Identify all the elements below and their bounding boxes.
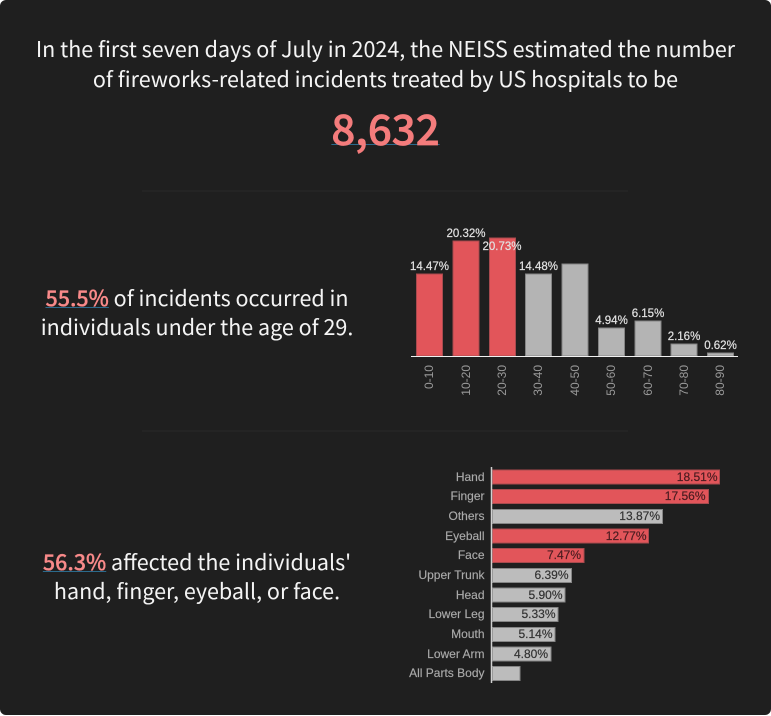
bar chart: incidents by age group: 4.94% — [595, 315, 628, 327]
text block: body part callout — [42, 546, 351, 606]
bar chart: incidents by body part: 5.33% — [521, 607, 556, 621]
bar chart: incidents by body part: Lower Leg — [428, 607, 484, 621]
bar chart: incidents by body part: Head — [456, 588, 484, 602]
bar chart: incidents by body part: 5.90% — [528, 588, 563, 602]
bar chart: incidents by age group: 70-80 — [677, 365, 691, 396]
bar chart: incidents by age group: 2.16% — [668, 331, 700, 343]
text block: body part callout: hand, finger, eyeball, or face. — [54, 575, 340, 606]
bar chart: incidents by age group: 0-10 — [422, 365, 436, 389]
bar chart: incidents by body part: 5.14% — [518, 627, 553, 641]
bar chart: incidents by age group: 0.62% — [704, 340, 737, 352]
bar chart: incidents by age group: 30-40 — [531, 365, 545, 396]
heading: intro text — [36, 33, 736, 94]
bar chart: incidents by body part: Finger — [450, 489, 485, 503]
bar chart: incidents by body part: Mouth — [451, 627, 484, 641]
bar chart: incidents by body part: 18.51% — [677, 470, 718, 484]
bar chart: incidents by body part: All Parts Body — [409, 666, 484, 680]
bar chart: incidents by age group: 50-60 — [604, 365, 618, 396]
bar chart: incidents by body part: Face — [458, 548, 485, 562]
bar chart: incidents by body part: 7.47% — [547, 548, 581, 562]
bar chart: incidents by age group: 20.73% — [482, 241, 522, 253]
bar chart: incidents by age group: 6.15% — [632, 308, 664, 320]
bar chart: incidents by body part — [409, 467, 720, 683]
text block: body part callout: 56.3% affected the individuals' — [43, 546, 351, 577]
bar chart: incidents by body part: Upper Trunk — [418, 568, 485, 582]
text block: age callout: individuals under the age of 29. — [41, 311, 353, 342]
bar chart: incidents by body part: Lower Arm — [427, 647, 484, 661]
bar chart: incidents by body part: Others — [448, 509, 484, 523]
bar chart: incidents by age group: 60-70 — [641, 365, 655, 396]
bar chart: incidents by body part: 4.80% — [514, 647, 548, 661]
heading: intro text: of fireworks-related incidents treated by US hospitals to be — [93, 63, 678, 94]
bar chart: incidents by body part: Hand — [456, 470, 484, 484]
big number: 8,632: 8,632 — [331, 97, 440, 158]
bar chart: incidents by body part: 17.56% — [665, 489, 706, 503]
bar chart: incidents by age group: 14.48% — [519, 261, 558, 273]
bar chart: incidents by age group — [410, 228, 738, 396]
bar chart: incidents by age group: 20-30 — [495, 365, 509, 396]
bar chart: incidents by age group: 80-90 — [713, 365, 727, 396]
bar chart: incidents by body part: Eyeball — [445, 529, 484, 543]
heading: intro text: In the first seven days of July in 2024, the NEISS estimated the number — [36, 33, 735, 64]
bar chart: incidents by age group: 40-50 — [568, 365, 582, 396]
bar chart: incidents by body part: 12.77% — [606, 529, 647, 543]
text block: age callout: 55.5% of incidents occurred in — [45, 282, 349, 313]
bar chart: incidents by age group: 14.47% — [410, 261, 449, 273]
text block: age callout — [41, 282, 353, 342]
bar chart: incidents by body part: 13.87% — [619, 509, 660, 523]
bar chart: incidents by body part: 6.39% — [534, 568, 569, 582]
bar chart: incidents by age group: 20.32% — [446, 228, 486, 240]
bar chart: incidents by age group: 10-20 — [459, 365, 473, 396]
